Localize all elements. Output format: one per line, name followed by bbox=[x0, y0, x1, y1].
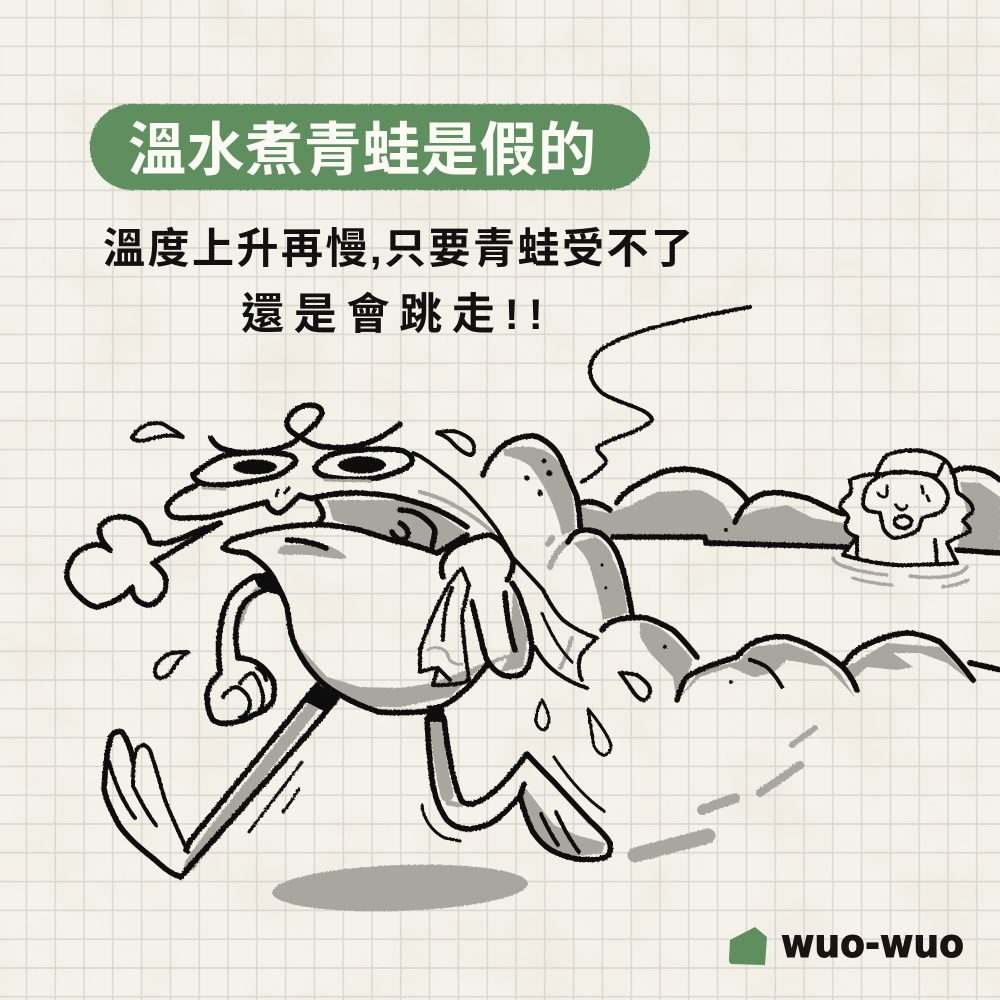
monkey fur bbox=[840, 473, 973, 543]
hill spots bbox=[524, 459, 733, 684]
right hand bbox=[441, 535, 513, 580]
snout and upper lip bbox=[167, 485, 467, 527]
nostrils bbox=[276, 488, 289, 496]
logo wordmark: wuo-wuo bbox=[781, 922, 964, 967]
left eye bbox=[193, 452, 295, 485]
near hills bbox=[483, 436, 1000, 703]
tongue bbox=[392, 510, 435, 547]
frog face bbox=[167, 405, 467, 548]
logo house icon bbox=[729, 927, 767, 965]
towel left bbox=[420, 568, 469, 685]
eye shadow bbox=[203, 480, 370, 489]
water ripples bbox=[833, 558, 968, 587]
subtitle: 還是會跳走!! bbox=[241, 291, 543, 339]
left arm with fist bbox=[207, 572, 282, 724]
monkey features bbox=[878, 486, 929, 510]
front leg bbox=[427, 704, 610, 860]
back leg bbox=[104, 683, 338, 877]
chin mark bbox=[287, 540, 326, 548]
frog body shading bbox=[277, 500, 487, 707]
mouth corner bbox=[317, 502, 323, 523]
brow and head loop bbox=[211, 405, 400, 453]
monkey face bbox=[863, 472, 948, 538]
back leg motion lines bbox=[249, 762, 302, 832]
far hills bbox=[582, 469, 857, 547]
monkey in the hot spring bbox=[833, 450, 973, 587]
frog head curve bbox=[413, 453, 512, 557]
title pill bbox=[90, 104, 650, 190]
right hand grey finger bbox=[472, 583, 532, 676]
breath puff cloud bbox=[67, 517, 220, 607]
monkey shoulders and waterline bbox=[843, 537, 957, 565]
far right hill bbox=[952, 468, 1000, 553]
steam line bbox=[582, 307, 750, 482]
subtitle bbox=[103, 225, 693, 339]
title text: 溫水煮青蛙是假的 bbox=[128, 118, 596, 183]
right eye bbox=[315, 449, 412, 479]
monkey head towel bbox=[875, 450, 953, 476]
frog body outline bbox=[223, 525, 487, 713]
towel right bbox=[513, 558, 597, 688]
subtitle: 溫度上升再慢,只要青蛙受不了 bbox=[103, 225, 693, 272]
logo bbox=[729, 922, 964, 967]
sweat drops bbox=[132, 423, 650, 755]
head curve shading bbox=[420, 492, 493, 533]
ground dashes bbox=[635, 836, 708, 855]
ground shadow bbox=[271, 861, 529, 915]
title banner bbox=[90, 104, 650, 190]
front leg motion lines bbox=[422, 757, 604, 841]
